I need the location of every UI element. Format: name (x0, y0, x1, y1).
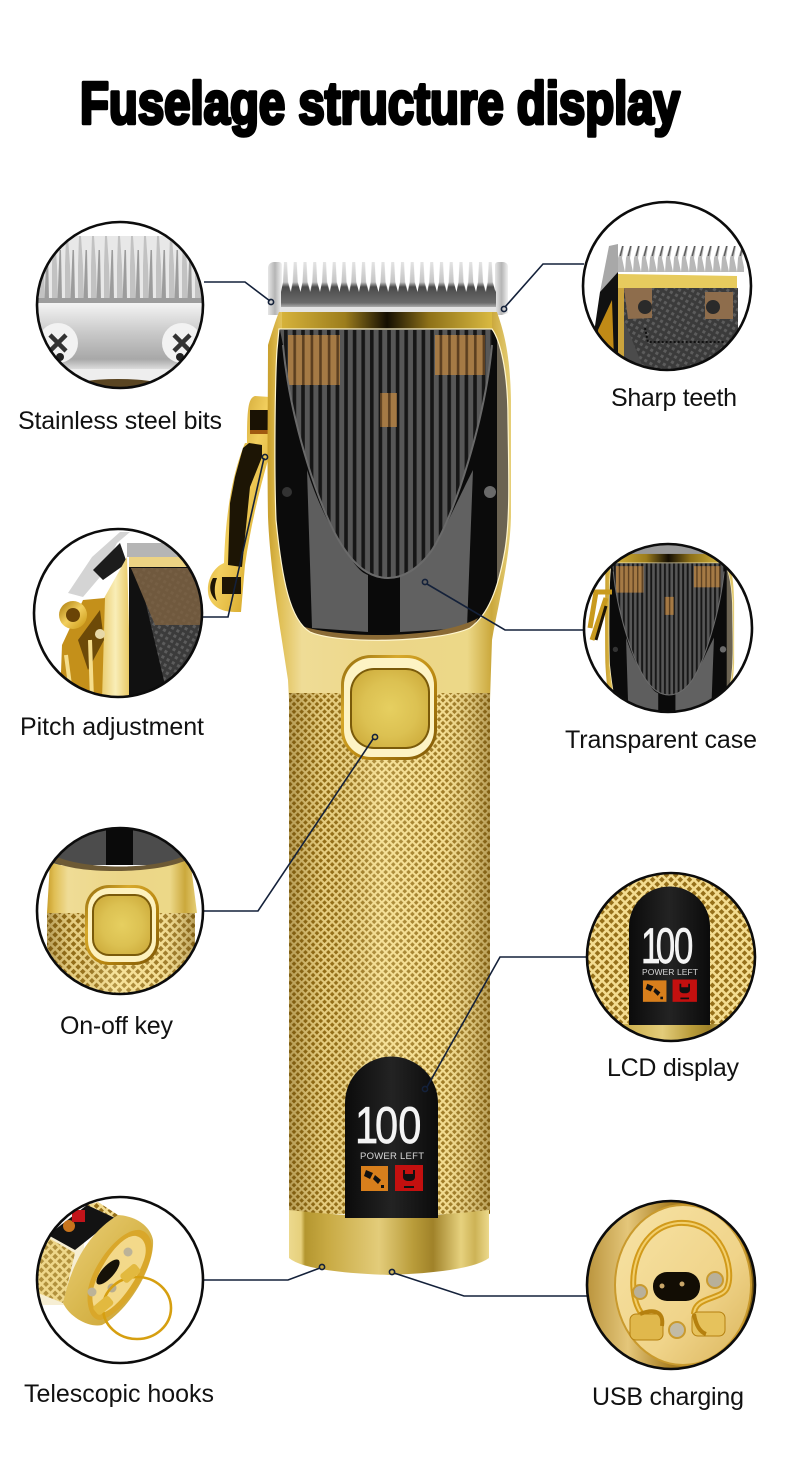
adjustment lever (208, 396, 270, 612)
panel: LCD display (422, 870, 757, 1092)
LCD caption: POWER LEFT (360, 1151, 424, 1162)
label: Transparent case (565, 726, 757, 754)
label: Sharp teeth (611, 384, 737, 412)
gold shoulder (268, 312, 511, 700)
transparent case (275, 329, 511, 644)
panel: stainless steel bits (18, 222, 274, 435)
label: On-off key (60, 1012, 174, 1040)
magnified charging port (585, 1200, 757, 1370)
leader line (204, 282, 274, 305)
bottom band (289, 1210, 489, 1275)
leader line (501, 264, 584, 312)
label: Stainless steel bits (18, 407, 222, 435)
label: Pitch adjustment (20, 713, 204, 741)
panel: sharp teeth (501, 202, 751, 412)
magnified button (37, 825, 203, 1003)
knurled handle (289, 693, 490, 1214)
magnified blade (36, 222, 204, 397)
LCD digits: 100 (641, 919, 693, 975)
magnified hooks (34, 1197, 203, 1363)
clipper illustration (208, 262, 511, 1275)
power button (341, 655, 437, 760)
magnified lever (34, 529, 205, 700)
leader line (204, 734, 378, 911)
magnified teeth (583, 202, 751, 373)
panel: USB charging (389, 1200, 757, 1411)
panel: pitch adjustment (20, 454, 268, 741)
panel: telescopic hooks (24, 1197, 325, 1408)
label: LCD display (607, 1054, 740, 1082)
panel: on-off key (37, 734, 378, 1040)
leader line (204, 1264, 325, 1280)
panel: transparent case (422, 544, 757, 760)
leader line (389, 1269, 587, 1296)
magnified LCD (585, 870, 757, 1044)
LCD caption: POWER LEFT (642, 967, 698, 977)
leader line (422, 579, 584, 630)
blade teeth (268, 262, 508, 315)
leader line (422, 957, 587, 1092)
leader line (203, 454, 268, 617)
label: USB charging (592, 1383, 744, 1411)
magnified case (582, 542, 754, 714)
LCD digits: 100 (355, 1096, 421, 1154)
label: Telescopic hooks (24, 1380, 214, 1408)
LCD display (345, 1057, 438, 1218)
